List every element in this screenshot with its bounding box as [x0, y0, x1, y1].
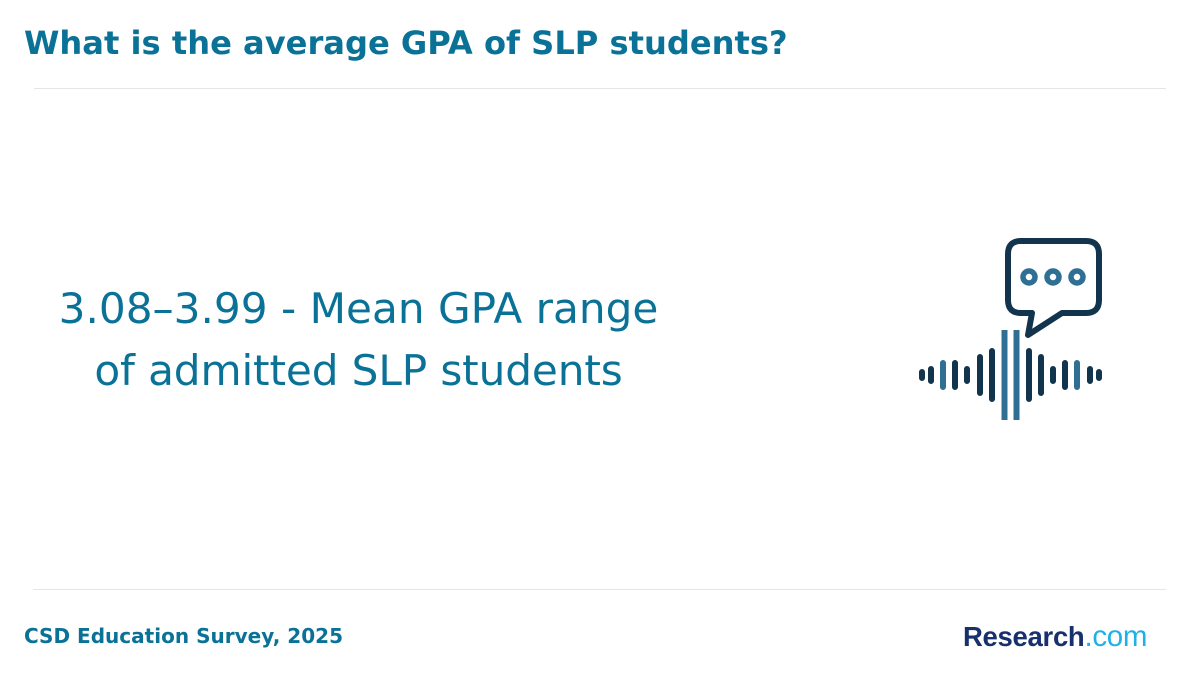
- icon: speech bubble with sound wave: [919, 238, 1102, 420]
- main statistic text: 3.08–3.99 - Mean GPA range: [59, 284, 658, 333]
- icon: sound wave: [922, 330, 1099, 420]
- title: What is the average GPA of SLP students?: [24, 24, 788, 62]
- source note: CSD Education Survey, 2025: [24, 624, 343, 648]
- logo: Research.com: Research.com: [963, 620, 1147, 653]
- icon: speech bubble: [1008, 241, 1099, 335]
- main statistic text: of admitted SLP students: [94, 346, 623, 395]
- main statistic text: [59, 284, 658, 395]
